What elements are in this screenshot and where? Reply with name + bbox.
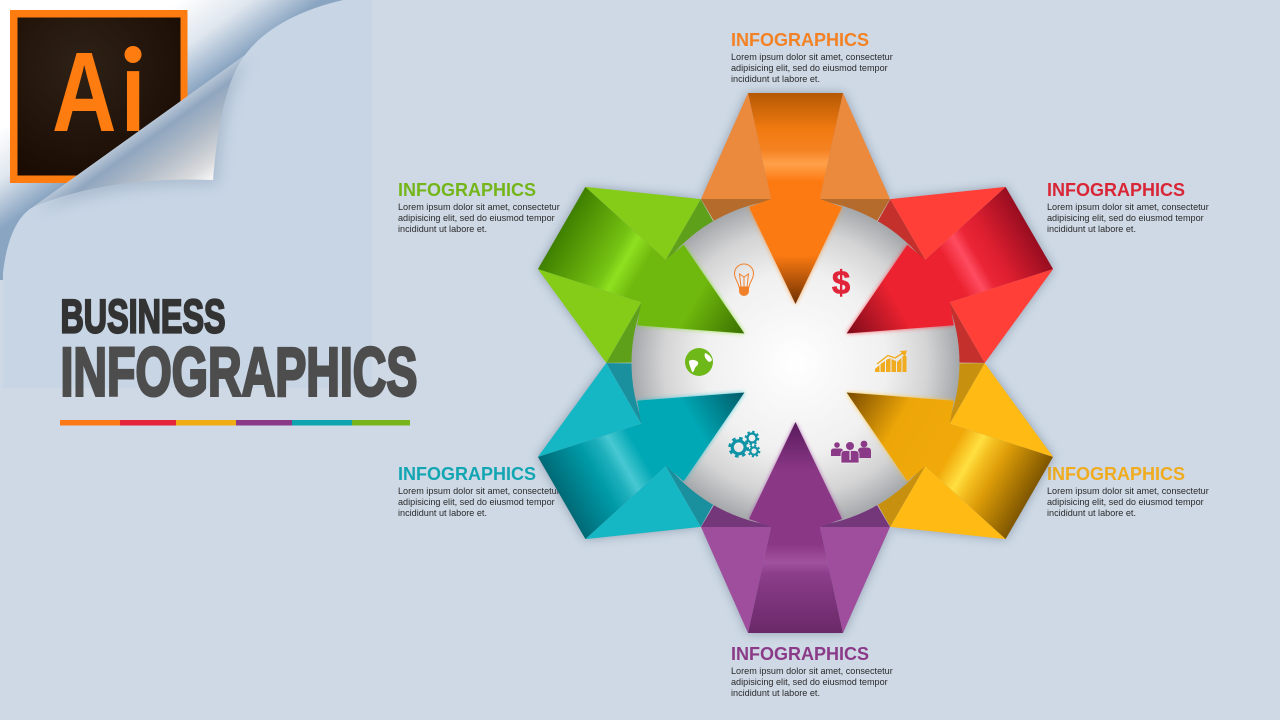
text block: red: incididunt ut labore et. xyxy=(1047,224,1136,234)
text block: orange: adipisicing elit, sed do eiusmod tempor xyxy=(731,63,888,73)
text block: red: Lorem ipsum dolor sit amet, consectetur xyxy=(1047,202,1209,212)
text block: red xyxy=(1047,180,1209,234)
arm: purple xyxy=(701,422,890,633)
text block: orange xyxy=(731,30,893,84)
fold shadows behind disc xyxy=(606,199,985,527)
Adobe Illustrator logo xyxy=(10,10,188,183)
page corner backing xyxy=(0,0,372,280)
text block: green: INFOGRAPHICS xyxy=(398,180,536,200)
arm: yellow xyxy=(799,311,1077,580)
arm: orange xyxy=(701,93,890,304)
text block: teal: Lorem ipsum dolor sit amet, consectetur xyxy=(398,486,560,496)
arm: red xyxy=(799,146,1077,415)
heading: business infographics xyxy=(60,290,418,410)
text block: green: Lorem ipsum dolor sit amet, consectetur xyxy=(398,202,560,212)
heading: business infographics: INFOGRAPHICS xyxy=(60,334,418,410)
text block: green: adipisicing elit, sed do eiusmod tempor xyxy=(398,213,555,223)
text block: teal: adipisicing elit, sed do eiusmod tempor xyxy=(398,497,555,507)
heading: business infographics: BUSINESS xyxy=(60,290,226,344)
text block: yellow: adipisicing elit, sed do eiusmod tempor xyxy=(1047,497,1204,507)
text block: purple: INFOGRAPHICS xyxy=(731,644,869,664)
icon: globe xyxy=(685,348,713,376)
Adobe Illustrator logo: i xyxy=(121,29,146,155)
text block: teal: INFOGRAPHICS xyxy=(398,464,536,484)
text block: yellow xyxy=(1047,464,1209,518)
text block: orange: incididunt ut labore et. xyxy=(731,74,820,84)
arm: teal xyxy=(514,311,792,580)
text block: orange: INFOGRAPHICS xyxy=(731,30,869,50)
icon: light bulb xyxy=(734,264,754,296)
text block: green xyxy=(398,180,560,234)
text block: red: INFOGRAPHICS xyxy=(1047,180,1185,200)
icon: dollar: $ xyxy=(832,264,850,301)
text block: green: incididunt ut labore et. xyxy=(398,224,487,234)
text block: teal xyxy=(398,464,560,518)
text block: yellow: Lorem ipsum dolor sit amet, consectetur xyxy=(1047,486,1209,496)
central disc xyxy=(632,199,960,527)
text block: purple xyxy=(731,644,893,698)
text block: purple: Lorem ipsum dolor sit amet, consectetur xyxy=(731,666,893,676)
page curl flap xyxy=(33,55,245,207)
text block: yellow: INFOGRAPHICS xyxy=(1047,464,1185,484)
text block: orange: Lorem ipsum dolor sit amet, consectetur xyxy=(731,52,893,62)
page curl shadow xyxy=(50,67,242,207)
icon: team xyxy=(831,441,871,463)
text block: red: adipisicing elit, sed do eiusmod tempor xyxy=(1047,213,1204,223)
arm: green xyxy=(514,146,792,415)
Adobe Illustrator logo: A xyxy=(52,29,116,155)
curled page sheet xyxy=(3,0,372,388)
text block: teal: incididunt ut labore et. xyxy=(398,508,487,518)
icon: bar chart xyxy=(875,350,907,372)
text block: purple: adipisicing elit, sed do eiusmod tempor xyxy=(731,677,888,687)
colour strip under heading xyxy=(60,420,410,426)
icon: gears xyxy=(730,432,760,456)
text block: yellow: incididunt ut labore et. xyxy=(1047,508,1136,518)
text block: purple: incididunt ut labore et. xyxy=(731,688,820,698)
